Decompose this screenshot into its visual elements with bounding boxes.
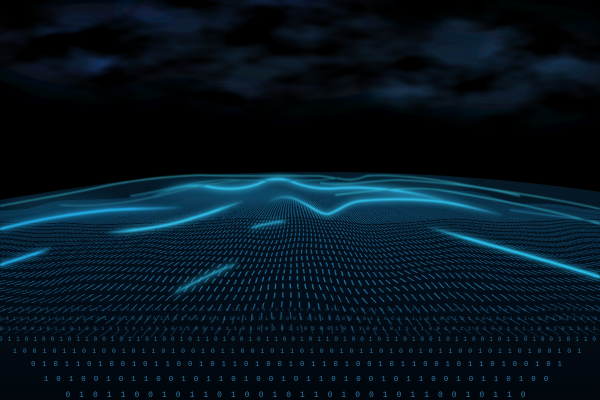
binary digits foreground: 10110010110100101101001011001011010010110100101100101101001011010010111011001011010010110100101100 [0,307,600,313]
storm clouds [0,0,600,150]
binary digits foreground: 0101100101101001011010010110010110 [65,391,535,400]
binary digits foreground: 010110100101100101101001011010010110010110100101 [31,361,569,369]
binary digits foreground: 1011001011010010110100101100101101001011010010110010110100101101001011001011010 [0,325,600,332]
dotted perspective grid [0,175,600,341]
glowing wave ridges [0,175,600,296]
binary digits foreground: 1001011010010110100101100101101001011010010110010110100101 [13,348,587,355]
binary digits foreground [0,307,600,400]
wave landscape [0,165,600,400]
ridge glow halo [0,179,600,296]
binary digits foreground: 0110100101100101101001011010010110010110100101101001011001011010010110 [0,336,600,343]
bright ridge lines [0,175,600,296]
cloud texture [0,0,600,150]
binary digits foreground: 01101001011001011010010110100101100101101001011010010110010110100101101001011001011010 [0,316,600,322]
binary digits foreground: 10100101100101101001011010010110010110100 [44,376,556,384]
ground surface [0,165,600,400]
horizon haze [0,184,470,210]
